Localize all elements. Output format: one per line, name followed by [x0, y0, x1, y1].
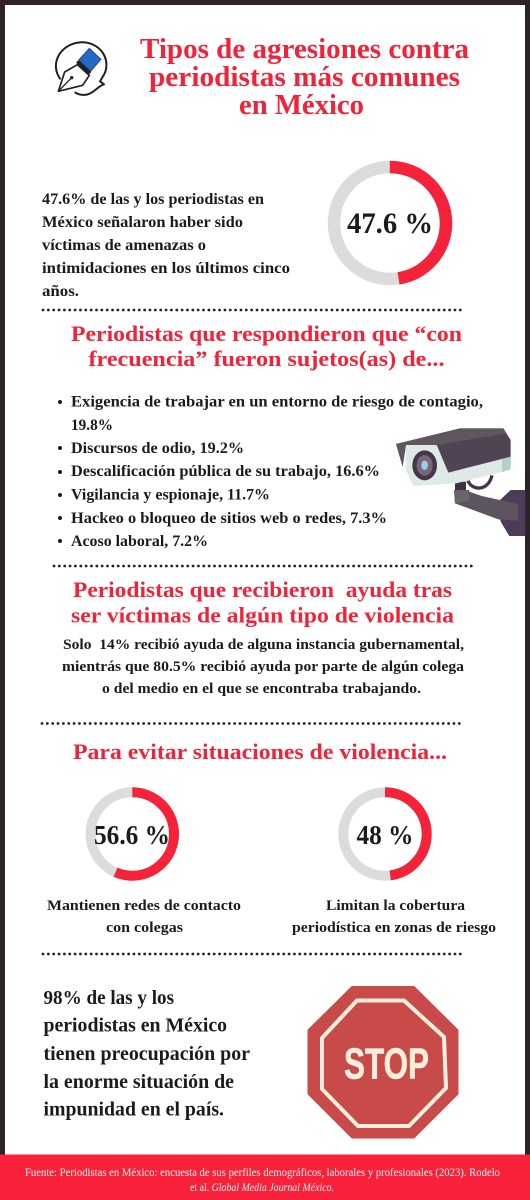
text: help received [62, 637, 465, 697]
list: aggression types: Discursos de odio, 19.2% [71, 440, 244, 457]
text: impunity statistic: la enorme situación de [44, 1072, 234, 1093]
title [140, 33, 469, 121]
caption: contact networks: Mantienen redes de contacto [47, 898, 241, 914]
text: threats statistic: años. [42, 283, 79, 300]
title: periodistas más comunes [149, 61, 460, 93]
icon: stop sign [308, 986, 458, 1138]
heading: frequent aggressions [71, 321, 463, 371]
heading: frequent aggressions: Periodistas que respondieron que “con [71, 321, 463, 346]
list: aggression types: 19.8% [71, 417, 113, 434]
icon: fountain pen in speech bubble [56, 42, 106, 95]
text: threats statistic: México señalaron haber sido [42, 214, 243, 231]
donut chart: 56.6%: 56.6 % [94, 820, 170, 850]
icon: security camera [396, 428, 525, 536]
donut chart: 47.6%: 47.6 % [347, 207, 433, 240]
footer: source: Fuente: Periodistas en México: encuesta de sus perfiles demográficos, laborales y profesionales (2023). Rodelo [25, 1167, 500, 1179]
text: impunity statistic: 98% de las y los [44, 988, 174, 1009]
text: impunity statistic: periodistas en México [44, 1016, 227, 1036]
icon: stop sign: STOP [344, 1040, 429, 1088]
text: help received: o del medio en el que se encontraba trabajando. [102, 681, 421, 697]
heading: frequent aggressions: frecuencia” fueron sujetos(as) de... [88, 346, 444, 371]
list: aggression types: Acoso laboral, 7.2% [71, 533, 208, 550]
caption: contact networks [47, 898, 241, 936]
text: threats statistic: 47.6% de las y los periodistas en [42, 191, 264, 208]
list: aggression types: Vigilancia y espionaje, 11.7% [71, 486, 270, 504]
caption: contact networks: con colegas [106, 920, 183, 936]
donut chart: 48% [343, 792, 427, 876]
donut chart: 48%: 48 % [356, 820, 414, 850]
text: impunity statistic: impunidad en el país. [44, 1100, 224, 1120]
list: aggression types: Exigencia de trabajar en un entorno de riesgo de contagio, [71, 394, 483, 410]
caption: limited coverage: periodística en zonas de riesgo [292, 920, 496, 936]
caption: limited coverage: Limitan la cobertura [326, 898, 466, 914]
title: en México [239, 89, 364, 121]
caption: limited coverage [292, 898, 496, 936]
heading: help received [71, 577, 454, 628]
text: threats statistic: víctimas de amenazas o [42, 237, 206, 254]
text: threats statistic [42, 191, 290, 300]
heading: avoiding violence: Para evitar situaciones de violencia... [73, 739, 447, 764]
text: impunity statistic [44, 988, 250, 1120]
text: help received: Solo 14% recibió ayuda de alguna instancia gubernamental, [63, 637, 464, 653]
donut chart: 47.6% [334, 167, 446, 279]
donut chart: 56.6% [91, 792, 174, 876]
heading: help received: Periodistas que recibieron ayuda tras [73, 577, 452, 602]
footer: source [0, 1154, 530, 1200]
title: Tipos de agresiones contra [140, 33, 469, 65]
list: aggression types: Hackeo o bloqueo de sitios web o redes, 7.3% [71, 510, 387, 527]
text: help received: mientrás que 80.5% recibió ayuda por parte de algún colega [62, 659, 465, 675]
list: aggression types: Descalificación pública de su trabajo, 16.6% [71, 463, 380, 480]
text: impunity statistic: tienen preocupación por [44, 1044, 250, 1065]
text: threats statistic: intimidaciones en los últimos cinco [42, 260, 290, 277]
heading: help received: ser víctimas de algún tipo de violencia [71, 602, 454, 628]
list: aggression types [58, 394, 483, 550]
footer: source: et al. Global Media Journal México. [190, 1182, 334, 1194]
